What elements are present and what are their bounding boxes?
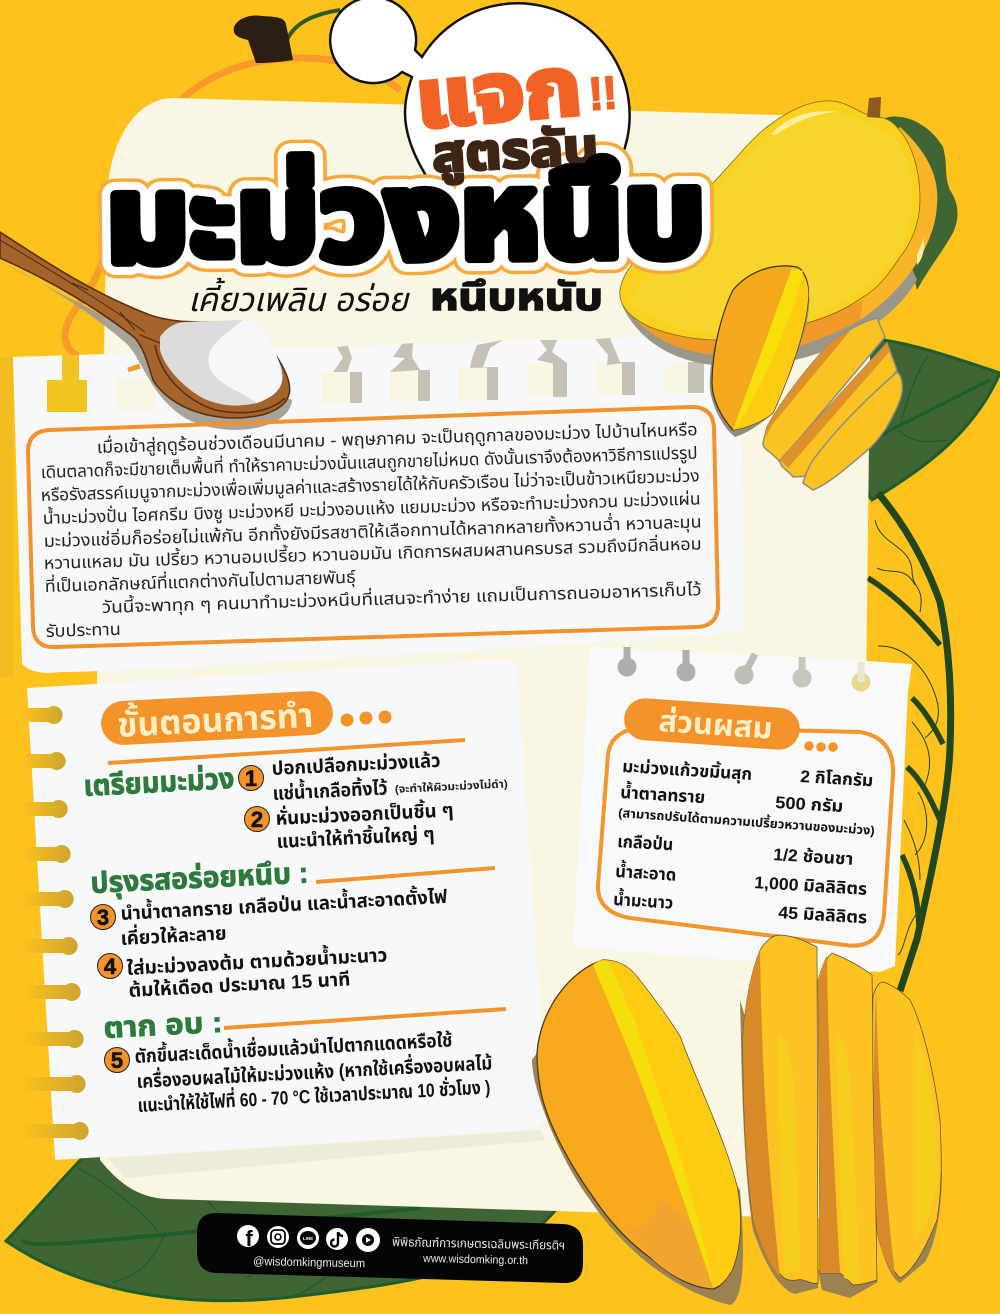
mango slice A <box>740 935 818 1294</box>
icon: line: LINE <box>303 1236 313 1241</box>
ingredient list: น้ำมะนาว <box>613 887 674 913</box>
section: seasoning: 3 <box>97 905 109 930</box>
ingredient list: 45 มิลลิลิตร <box>778 903 868 927</box>
pill: ingredients heading <box>623 697 801 751</box>
tab cut-outs <box>0 338 704 677</box>
intro paragraph: เดินตลาดก็จะมีขายเต็มพื้นที่ ทำให้ราคามะม่วงนั้นแสนถูกขายไม่หมด ดังนั้นเราจึงต้องหาวิธีการแปรรูป <box>40 441 698 484</box>
paper: steps <box>20 660 547 1160</box>
mango cheek bottom <box>532 960 743 1305</box>
section: dry and bake <box>103 1007 506 1117</box>
tagline: เคี้ยวเพลิน อร่อย <box>188 277 410 318</box>
section: dry and bake: เครื่องอบผลไม้ให้มะม่วงแห้ง (หากใช้เครื่องอบผลไม้ <box>136 1049 493 1093</box>
right leaf <box>850 338 1000 500</box>
ingredient list: 1/2 ช้อนชา <box>773 845 854 869</box>
mango cheek piece <box>710 266 809 437</box>
icon: facebook <box>237 1225 259 1251</box>
mango slices top <box>763 318 902 490</box>
binder notches <box>20 706 89 1140</box>
section: prepare mango: 2 <box>251 807 263 832</box>
section: prepare mango <box>83 750 508 853</box>
heading: สูตรลับ: สูตรลับ <box>431 118 599 185</box>
mango slice B <box>818 953 878 1298</box>
slice 1 <box>763 318 885 462</box>
three dots <box>804 741 838 752</box>
main title: มะม่วงหนึบ <box>105 146 706 288</box>
icon: instagram <box>267 1226 289 1248</box>
section: dry and bake: ตักขึ้นสะเด็ดน้ำเชื่อมแล้วนำไปตากแดดหรือใช้ <box>134 1026 453 1068</box>
pill: ingredients heading: ส่วนผสม <box>658 705 774 746</box>
tagline: หนึบหนับ <box>430 277 603 319</box>
ingredient list <box>613 755 875 927</box>
slice 3 <box>803 372 902 490</box>
tagline <box>188 277 603 319</box>
ingredient list: น้ำตาลทราย <box>620 780 706 807</box>
binder holes <box>618 647 870 691</box>
footer website: www.wisdomking.or.th <box>422 1253 528 1267</box>
intro paragraph: น้ำมะม่วงปั่น ไอศกรีม บิงซู มะม่วงหยี มะม่วงอบแห้ง แยมมะม่วง หรือจะทำมะม่วงกวน มะม่วงแผ่น <box>42 486 701 530</box>
section: dry and bake: 5 <box>111 1048 123 1073</box>
intro paragraph: มะม่วงแช่อิ่มก็อร่อยไม่แพ้กัน อีกทั้งยังมีรสชาติให้เลือกทานได้หลากหลายทั้งหวานฉ่ำ หวานละมุน <box>43 509 702 552</box>
ingredient list: มะม่วงแก้วขมิ้นสุก <box>622 755 753 785</box>
intro paragraph <box>40 417 702 641</box>
section: seasoning: 4 <box>104 954 117 979</box>
ingredient list: 2 กิโลกรัม <box>800 767 874 790</box>
green stalk <box>287 10 340 40</box>
intro paragraph: วันนี้จะพาทุก ๆ คนมาทำมะม่วงหนึบที่แสนจะทำง่าย แถมเป็นการถนอมอาหารเก็บไว้ <box>101 577 702 618</box>
section: prepare mango: หั่นมะม่วงออกเป็นชิ้น ๆ <box>275 797 454 830</box>
section: prepare mango: เตรียมมะม่วง <box>83 763 235 803</box>
section: prepare mango: แช่น้ำเกลือทิ้งไว้ <box>272 774 388 805</box>
icon: line <box>297 1227 319 1249</box>
brown stalk <box>234 15 293 63</box>
intro paragraph: หรือรังสรรค์เมนูจากมะม่วงเพื่อเพิ่มมูลค่าและสร้างรายได้ให้กับครัวเรือน ไม่ว่าจะเป็นข้าวเหนียวมะม่วง <box>40 463 700 507</box>
section: seasoning: เคี่ยวให้ละลาย <box>120 919 227 950</box>
heading: แจก: แจก <box>412 41 585 146</box>
spoon <box>0 232 292 430</box>
main title outline: มะม่วงหนึบ <box>105 146 706 288</box>
intro paragraph: ที่เป็นเอกลักษณ์ที่แตกต่างกันไปตามสายพันธุ์ <box>44 565 356 597</box>
main title outline: มะม่วงหนึบ <box>105 146 706 288</box>
icon: facebook: f <box>245 1226 253 1251</box>
mango slice C <box>873 982 942 1283</box>
ingredient list: 1,000 มิลลิลิตร <box>754 873 868 899</box>
section: prepare mango: 1 <box>245 766 257 791</box>
shadow: paper steps <box>108 1130 545 1178</box>
vine stem and branches <box>868 493 951 991</box>
section line <box>108 740 465 763</box>
bottom-left leaf <box>6 1150 560 1301</box>
section: seasoning: ใส่มะม่วงลงต้ม ตามด้วยน้ำมะนาว <box>126 941 388 980</box>
speech bubble <box>330 0 630 227</box>
cream paper background <box>97 98 873 1220</box>
ingredient list: เกลือป่น <box>617 832 674 854</box>
section: seasoning: ต้มให้เดือด ประมาณ 15 นาที <box>128 968 351 1002</box>
slice 2 <box>780 343 897 477</box>
three dots <box>340 710 392 726</box>
section: seasoning: ปรุงรสอร่อยหนึบ : <box>90 857 309 900</box>
section: dry and bake: ตาก อบ : <box>103 1007 223 1045</box>
paper: intro <box>0 334 745 677</box>
big mango <box>620 97 958 366</box>
section: prepare mango: แนะนำให้ทำชิ้นใหญ่ ๆ <box>276 821 435 853</box>
intro paragraph: หวานแหลม มัน เปรี้ยว หวานอมเปรี้ยว หวานอมมัน เกิดการผสมผสานครบรส รวมถึงมีกลิ่นหอม <box>43 531 702 573</box>
pill: steps heading: ขั้นตอนการทำ <box>116 692 314 745</box>
heading: exclamation: !! <box>587 66 619 120</box>
frame: intro text <box>28 407 718 647</box>
footer museum name: พิพิธภัณฑ์การเกษตรเฉลิมพระเกียรติฯ <box>392 1235 565 1253</box>
icon: tiktok <box>326 1228 348 1250</box>
section: seasoning: นำน้ำตาลทราย เกลือป่น และน้ำสะอาดตั้งไฟ <box>120 883 448 925</box>
section: prepare mango: ปอกเปลือกมะม่วงแล้ว <box>271 750 441 780</box>
footer handle: @wisdomkingmuseum <box>253 1254 365 1270</box>
section: seasoning <box>90 857 495 1002</box>
ingredient list: 500 กรัม <box>775 793 844 816</box>
ingredient list: (สามารถปรับได้ตามความเปรี้ยวหวานของมะม่วง) <box>618 804 875 838</box>
ingredient list: น้ำสะอาด <box>615 859 677 885</box>
frame: ingredients <box>598 727 893 946</box>
section: prepare mango: (จะทำให้ผิวมะม่วงไม่ดำ) <box>395 777 508 796</box>
orange mango outline <box>65 58 400 356</box>
intro paragraph: รับประทาน <box>46 620 121 641</box>
intro paragraph: เมื่อเข้าสู่ฤดูร้อนช่วงเดือนมีนาคม - พฤษภาคม จะเป็นฤดูกาลของมะม่วง ไปบ้านไหนหรือ <box>96 417 698 459</box>
footer bar <box>197 1213 583 1283</box>
paper: ingredients <box>573 647 912 972</box>
section: dry and bake: แนะนำให้ใช้ไฟที่ 60 - 70 °C ใช้เวลาประมาณ 10 ชั่วโมง ) <box>137 1073 491 1117</box>
icon: youtube <box>356 1228 380 1252</box>
